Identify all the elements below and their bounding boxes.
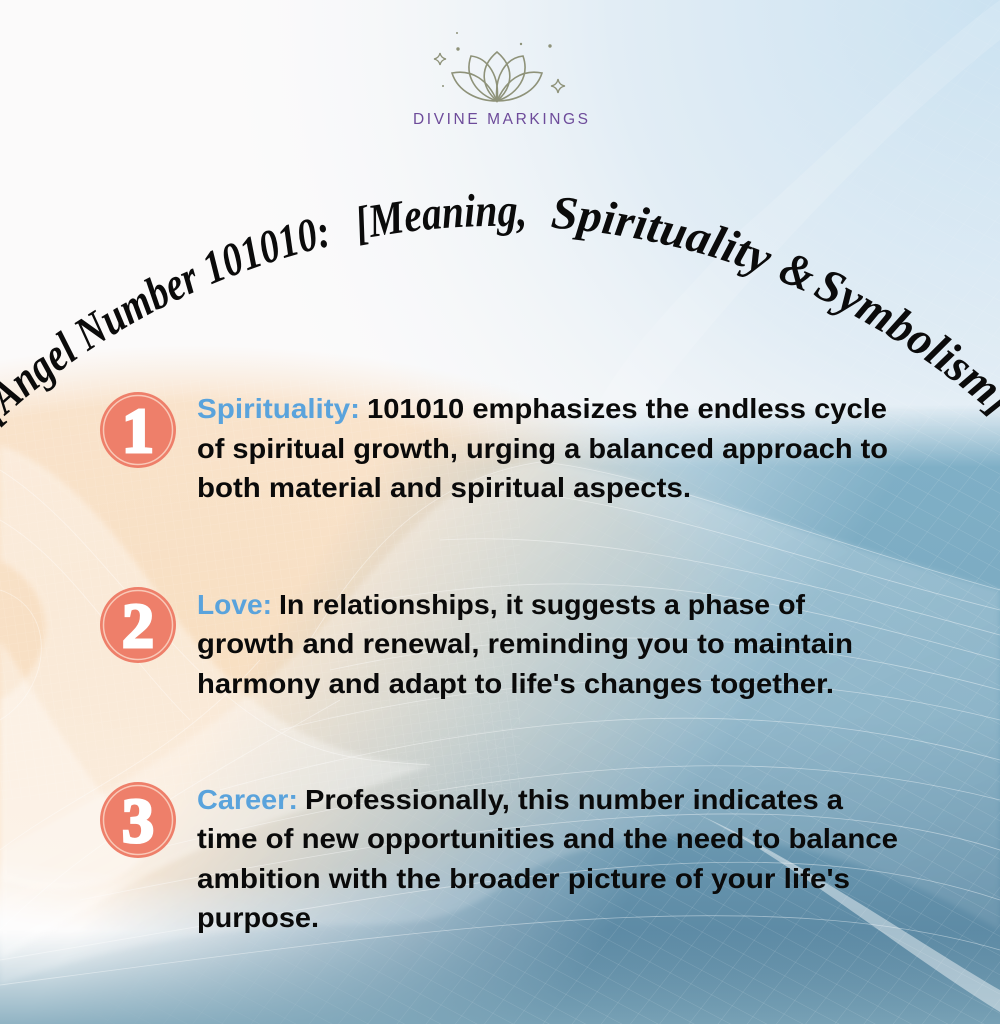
title: curved script heading: Spirituality: [551, 198, 772, 277]
text block: spirituality: [197, 393, 888, 503]
icon: sparkles: [434, 32, 565, 93]
text block: spirituality: 101010 emphasizes the endless cycle: [367, 393, 887, 424]
badge: number 1: [100, 392, 176, 468]
badge: number 2: [100, 587, 176, 663]
text block: career: Career:: [197, 784, 298, 815]
text block: love: [197, 589, 853, 699]
text block: love: In relationships, it suggests a phase of: [279, 589, 806, 620]
item 3: career: [100, 782, 898, 933]
logo: Divine Markings lotus with stars: [413, 32, 588, 128]
text block: career: Professionally, this number indicates a: [305, 784, 844, 815]
title: curved script heading: [0, 194, 1000, 428]
text block: career: time of new opportunities and the need to balance: [197, 823, 898, 854]
text block: spirituality: of spiritual growth, urging a balanced approach to: [197, 433, 888, 464]
badge: number 3: [100, 782, 176, 858]
badge: number 3: 3: [122, 785, 154, 856]
text block: career: [197, 784, 898, 933]
text block: love: Love:: [197, 589, 272, 620]
text block: career: ambition with the broader picture of your life's: [197, 863, 850, 894]
badge: number 2: 2: [122, 590, 154, 661]
text block: spirituality: both material and spiritual aspects.: [197, 472, 691, 503]
title: curved script heading: [Meaning,: [358, 194, 524, 246]
item 2: love: [100, 587, 853, 699]
icon: lotus flower: [452, 52, 542, 101]
text block: career: purpose.: [197, 902, 319, 933]
text block: love: harmony and adapt to life's changes together.: [197, 668, 834, 699]
text block: love: growth and renewal, reminding you to maintain: [197, 628, 853, 659]
text block: spirituality: Spirituality:: [197, 393, 360, 424]
item 1: spirituality: [100, 392, 888, 503]
background: fine white mesh lines: [0, 462, 1000, 985]
title: curved script heading: &: [780, 256, 814, 291]
logo wordmark: DIVINE MARKINGS: [413, 111, 588, 128]
badge: number 1: 1: [122, 395, 154, 466]
